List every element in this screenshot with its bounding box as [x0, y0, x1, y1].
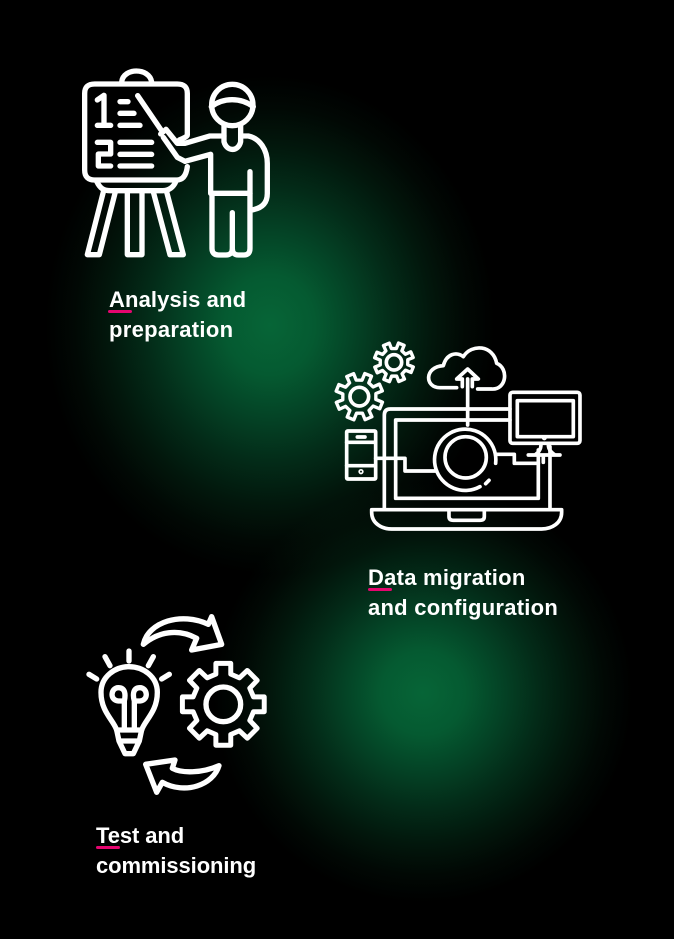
- icon: laptop with cloud, gears, phone and monitor: [329, 337, 580, 529]
- label: Data migration and configuration: Data migration: [368, 565, 526, 590]
- label: Analysis and preparation: Analysis and: [109, 287, 246, 312]
- label: Analysis and preparation: [109, 287, 246, 342]
- icon: presenter at numbered easel board: [85, 71, 267, 255]
- icon: light bulb, gear and cycle arrows: [89, 617, 264, 792]
- label: Test and commissioning: [96, 823, 256, 878]
- accent underline: Data: [368, 588, 392, 591]
- accent underline: Test: [96, 846, 120, 849]
- label: Analysis and preparation: preparation: [109, 317, 233, 342]
- label: Test and commissioning: commissioning: [96, 853, 256, 878]
- label: Test and commissioning: Test and: [96, 823, 184, 848]
- label: Data migration and configuration: [368, 565, 558, 620]
- accent underline: Analysis: [108, 310, 132, 313]
- label: Data migration and configuration: and configuration: [368, 595, 558, 620]
